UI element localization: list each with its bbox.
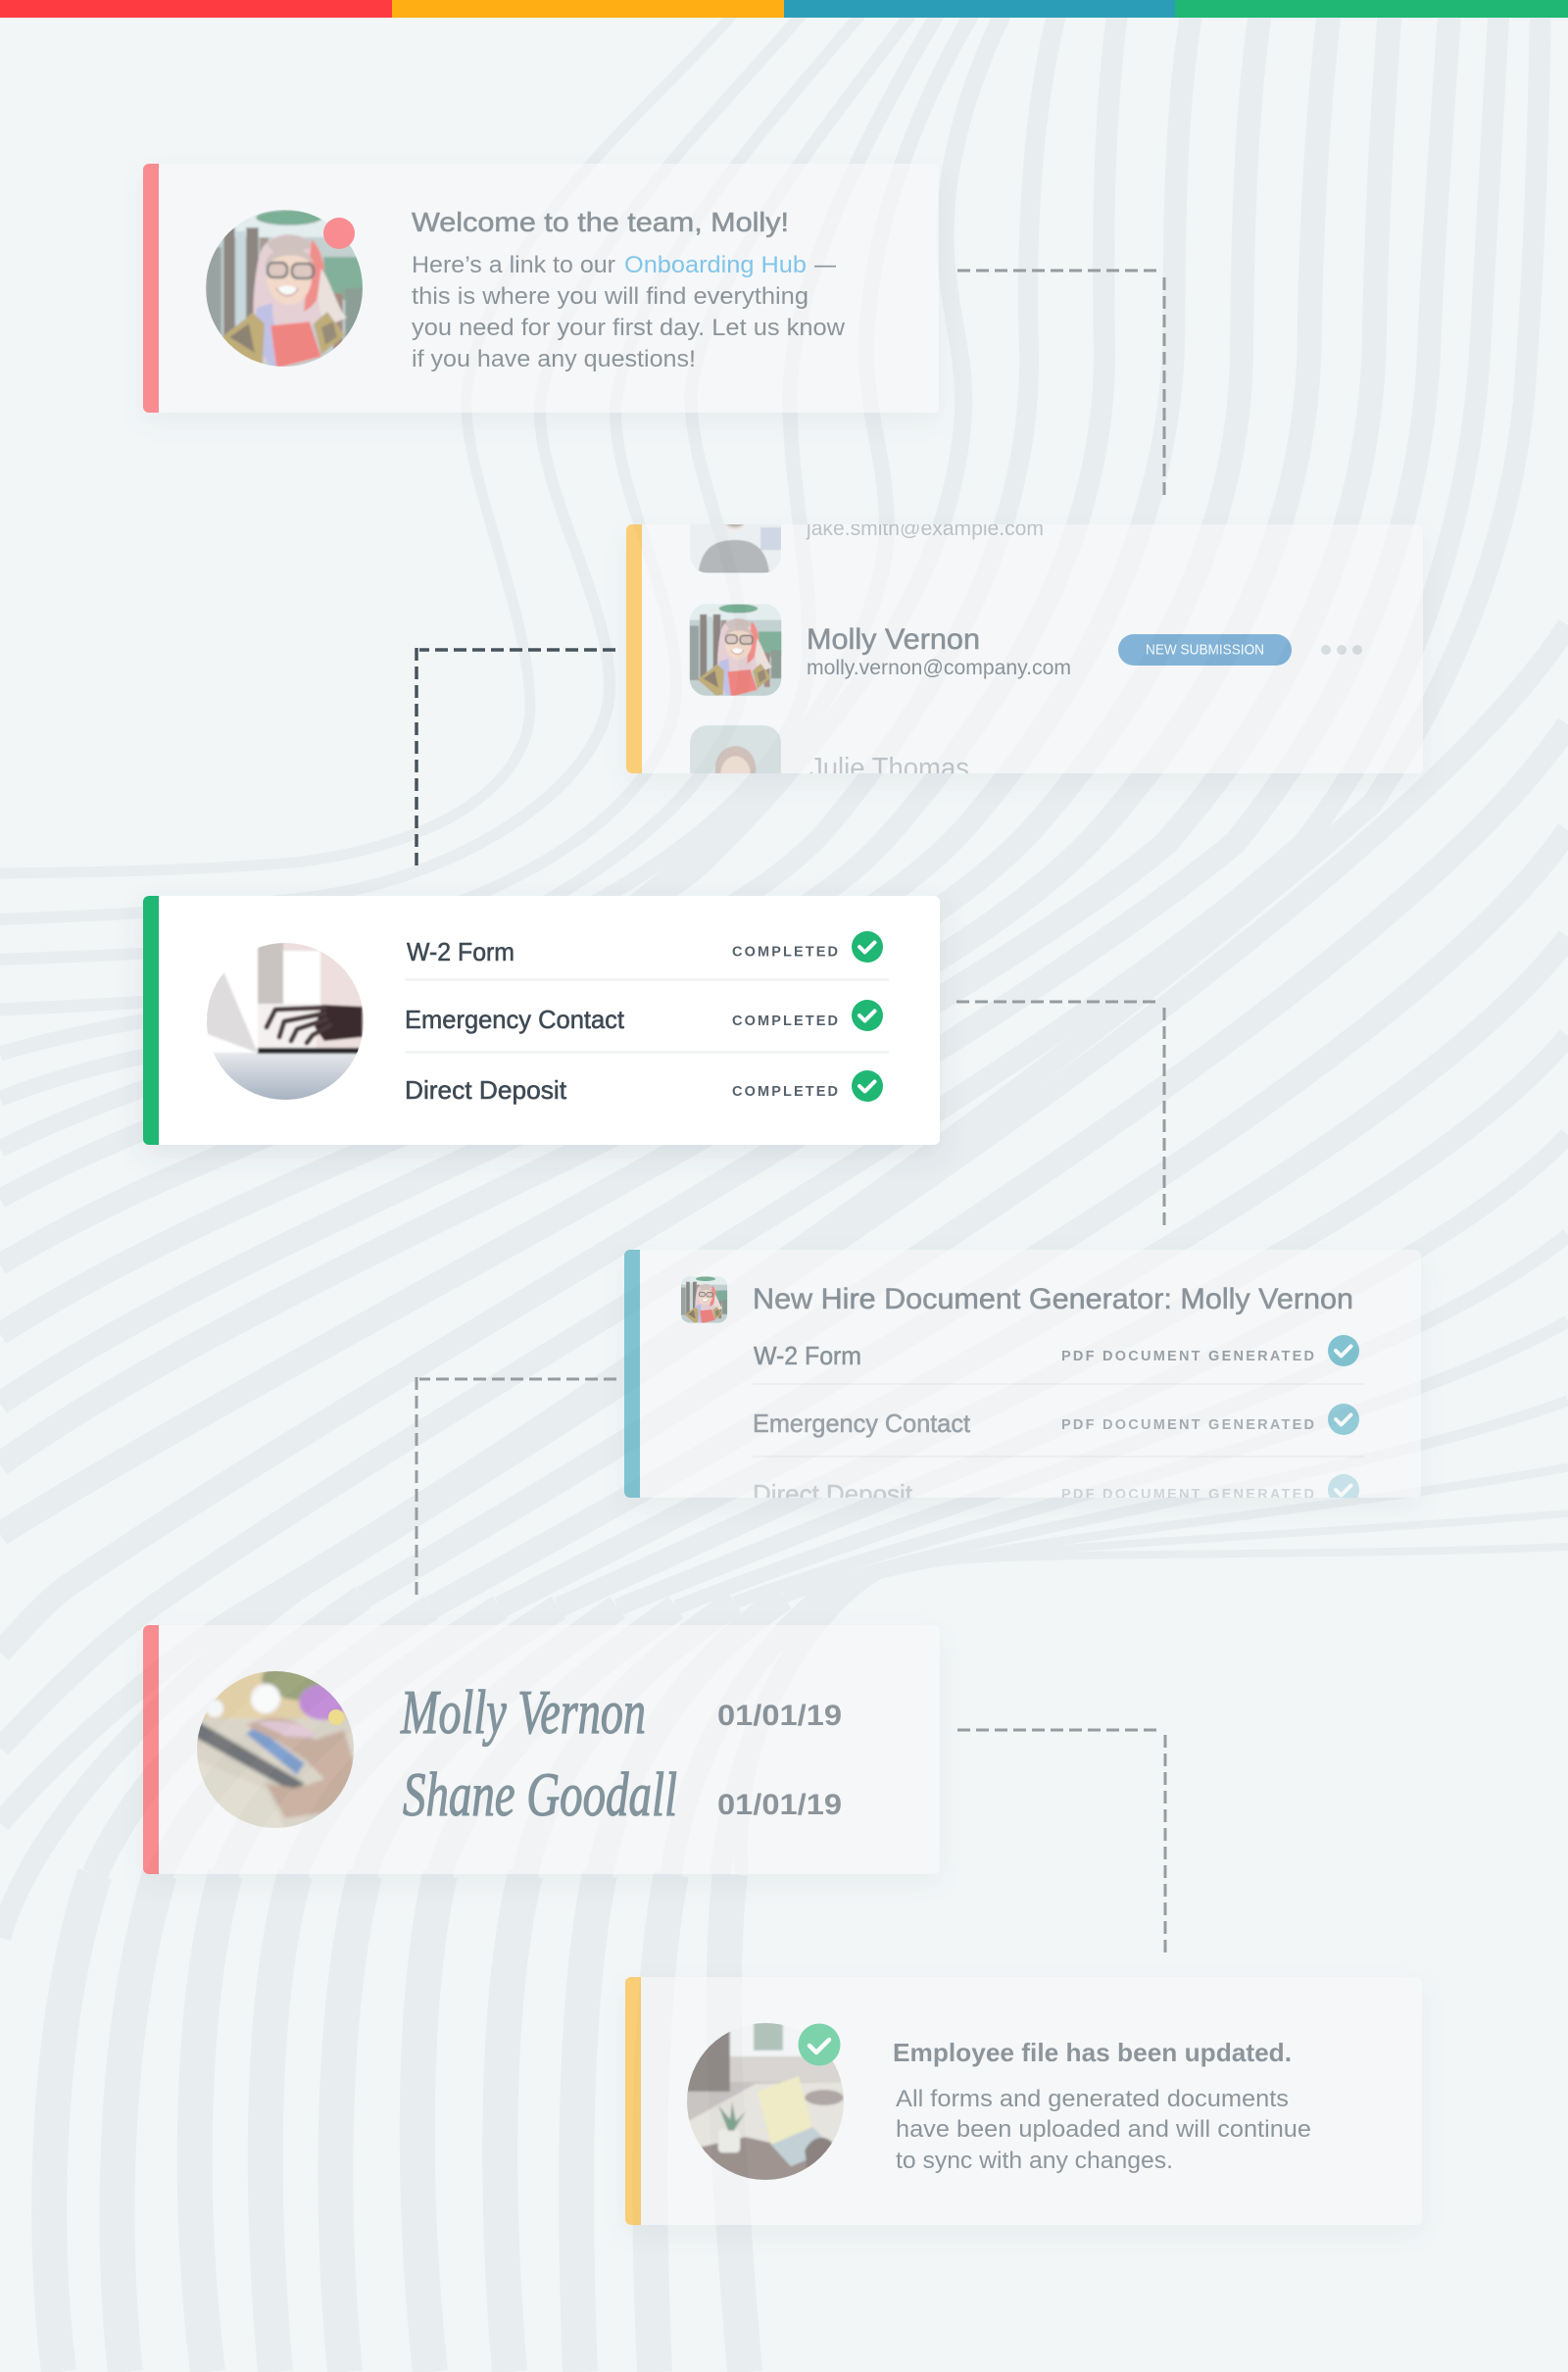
icon: check badge <box>798 2023 841 2066</box>
notification dot <box>323 218 355 249</box>
text block: file updated: All forms and generated documents <box>896 2086 1289 2112</box>
arrow: connector 4 <box>416 1377 616 1596</box>
panel: document generator <box>624 1250 1421 1508</box>
avatar: Jake <box>690 524 781 572</box>
badge: new submission <box>1118 634 1292 666</box>
avatar: Molly list <box>689 603 782 697</box>
text block: welcome message: if you have any questions! <box>412 346 696 372</box>
row: emergency contact: COMPLETED <box>732 1013 838 1029</box>
panel: employee file updated <box>625 1977 1310 2225</box>
row: W-2 form: COMPLETED <box>732 945 838 961</box>
heading: welcome: Welcome to the team, Molly! <box>412 207 789 237</box>
date 2: 01/01/19 <box>717 1789 842 1821</box>
arrow: connector 1 <box>957 271 1164 498</box>
arrow: connector 2 <box>416 648 615 868</box>
avatar: Julie <box>690 725 781 773</box>
row: W-2 PDF: W-2 Form <box>754 1341 861 1370</box>
text: Molly email: molly.vernon@company.com <box>807 657 1071 679</box>
row: direct deposit: Direct Deposit <box>405 1075 567 1105</box>
text block: file updated: have been uploaded and will continue <box>896 2116 1311 2143</box>
row: direct deposit <box>405 1070 883 1105</box>
panel: employee list <box>626 524 1423 773</box>
text: Molly name: Molly Vernon <box>807 623 980 656</box>
row: emergency contact: Emergency Contact <box>405 1005 625 1034</box>
text block: welcome message: — <box>814 252 836 278</box>
photo: typing on laptop <box>205 941 366 1102</box>
row: W-2 PDF: PDF DOCUMENT GENERATED <box>1061 1349 1314 1364</box>
text: Jake email: jake.smith@example.com <box>806 518 1044 540</box>
row: emergency PDF <box>753 1404 1359 1438</box>
signature: Molly Vernon: Molly Vernon <box>400 1677 646 1747</box>
text block: welcome message: Here’s a link to our <box>412 252 615 278</box>
badge: new submission: NEW SUBMISSION <box>1146 641 1264 659</box>
panel: welcome message <box>143 164 939 413</box>
top colour bar <box>0 0 1568 18</box>
heading: file updated: Employee file has been updated. <box>893 2038 1292 2067</box>
row: direct deposit: COMPLETED <box>732 1084 838 1100</box>
row: emergency PDF: Emergency Contact <box>753 1408 971 1438</box>
avatar: Molly small <box>680 1276 728 1323</box>
panel: signatures <box>143 1625 841 1874</box>
row: emergency PDF: PDF DOCUMENT GENERATED <box>1061 1417 1314 1433</box>
panel: completed forms <box>143 896 940 1145</box>
text block: file updated: to sync with any changes. <box>896 2148 1173 2174</box>
text block: welcome message <box>412 252 846 372</box>
row: W-2 PDF <box>754 1335 1359 1370</box>
row: direct deposit PDF: Direct Deposit <box>753 1479 913 1508</box>
photo: desk and laptop <box>685 2021 846 2182</box>
heading: generator: New Hire Document Generator: Molly Vernon <box>753 1283 1353 1315</box>
arrow: connector 3 <box>956 1002 1164 1227</box>
row: W-2 form <box>407 931 883 966</box>
row: direct deposit PDF <box>755 1474 1359 1498</box>
text block: welcome message: Onboarding Hub <box>624 252 807 278</box>
row: W-2 form: W-2 Form <box>407 937 514 966</box>
arrow: connector 5 <box>957 1730 1165 1955</box>
photo: phone in hand <box>197 1671 354 1828</box>
text block: welcome message: this is where you will find everything <box>412 283 808 310</box>
text block: file updated <box>896 2086 1311 2174</box>
text block: welcome message: you need for your first day. Let us know <box>412 315 846 341</box>
icon: more dots <box>1321 645 1362 655</box>
row: emergency contact <box>405 1000 883 1034</box>
date 1: 01/01/19 <box>717 1700 842 1732</box>
row: direct deposit PDF: PDF DOCUMENT GENERATED <box>1061 1487 1314 1503</box>
text: Julie name: Julie Thomas <box>809 753 969 784</box>
signature: Shane Goodall: Shane Goodall <box>403 1759 677 1829</box>
avatar: Molly <box>204 208 365 369</box>
